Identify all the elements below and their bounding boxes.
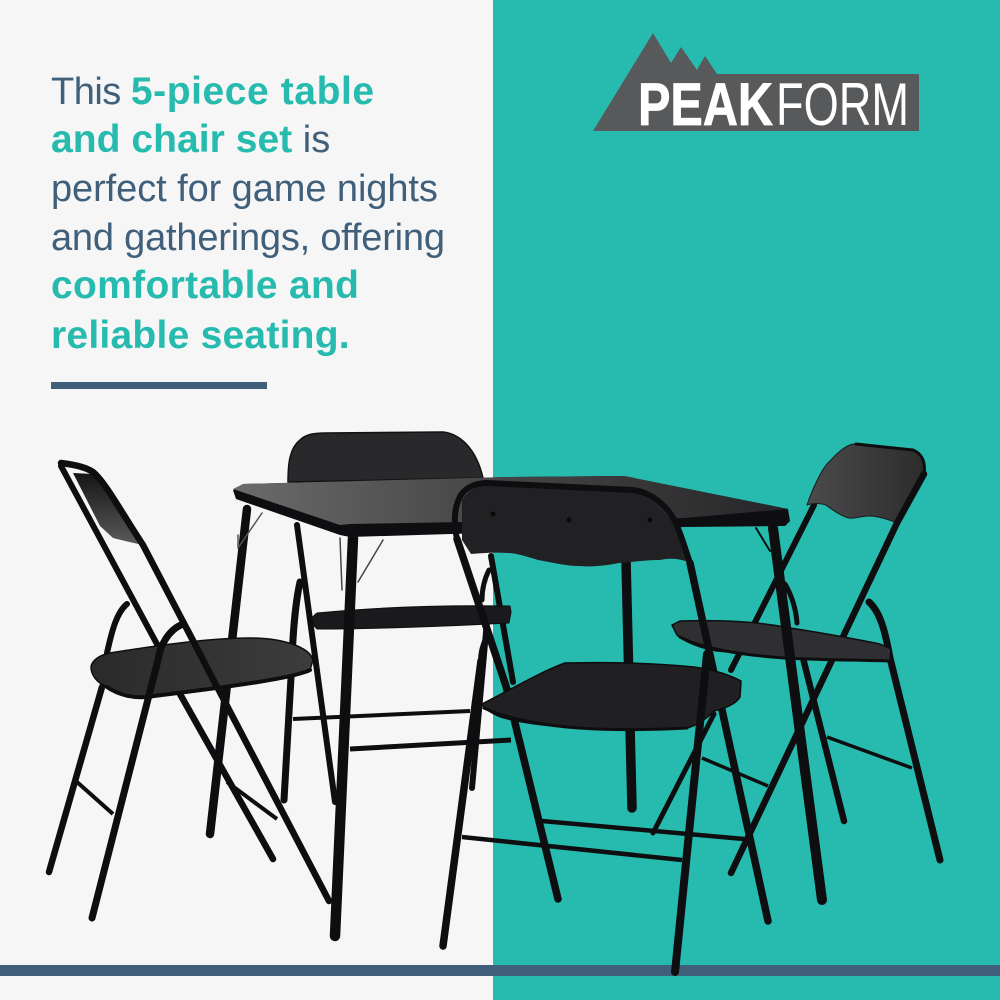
text block: description: and chair set is xyxy=(51,118,330,161)
accent rule under text xyxy=(51,382,267,389)
logo: PeakForm xyxy=(593,33,919,135)
front chair xyxy=(443,483,768,972)
text block: description: reliable seating. xyxy=(51,314,350,357)
bottom band xyxy=(0,965,1000,976)
right chair xyxy=(672,444,940,873)
text block: description xyxy=(51,70,445,357)
table back legs and braces xyxy=(210,509,770,834)
left chair xyxy=(49,463,329,918)
panel: teal background xyxy=(493,0,1000,1000)
table front legs xyxy=(335,528,822,936)
back chair xyxy=(284,432,513,800)
text block: description: and gatherings, offering xyxy=(51,217,445,259)
text block: description: This 5-piece table xyxy=(51,70,375,113)
text block: description: perfect for game nights xyxy=(51,168,438,210)
table top xyxy=(233,476,790,537)
text block: description: comfortable and xyxy=(51,264,359,307)
